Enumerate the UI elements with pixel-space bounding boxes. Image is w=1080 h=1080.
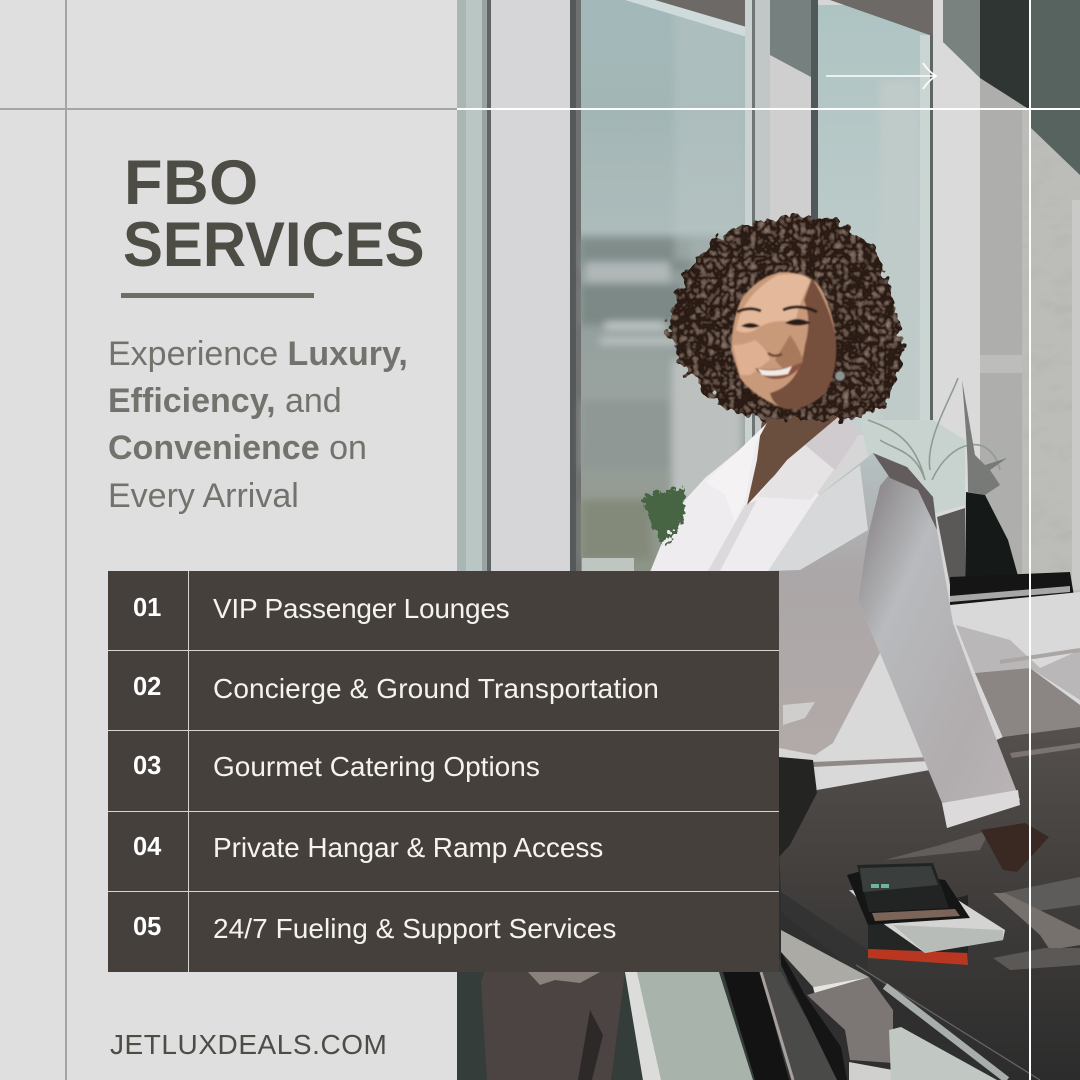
title underline [121, 293, 314, 298]
service 03: Gourmet Catering Options [213, 751, 540, 782]
pale window ledge [860, 420, 965, 515]
trousers waist [779, 757, 817, 857]
subtitle: Experience Luxury, [108, 335, 408, 373]
icon: arrow [826, 62, 938, 90]
left window frame [457, 0, 570, 575]
photo: woman at office window [457, 0, 1080, 1080]
grid line: horizontal gray [0, 108, 457, 110]
website url: JETLUXDEALS.COM [110, 1029, 387, 1060]
grid line: horizontal white [457, 108, 1080, 110]
hand [981, 823, 1049, 872]
title [123, 148, 425, 280]
service 01: VIP Passenger Lounges [213, 593, 509, 624]
service 05: 05 [133, 913, 161, 941]
wall shadow and sideboard [937, 380, 1022, 590]
service 02 [108, 650, 779, 730]
sleeve [858, 470, 1020, 828]
right window [770, 0, 935, 435]
title: FBO [124, 148, 259, 218]
subtitle: Every Arrival [108, 477, 299, 515]
subtitle: Efficiency, and [108, 382, 342, 420]
torso shadow [767, 453, 893, 755]
bottom left floor and trousers [457, 960, 841, 1080]
main window [570, 0, 770, 575]
table [778, 727, 1080, 1080]
shirt and body [650, 400, 1020, 828]
service 04: 04 [133, 833, 161, 861]
face [731, 272, 845, 409]
right collar [757, 413, 860, 500]
service 05: 24/7 Fueling & Support Services [213, 913, 616, 944]
turtleneck [747, 400, 848, 505]
grid line: vertical gray [65, 0, 67, 1080]
service 03 [108, 730, 779, 811]
title: SERVICES [123, 210, 425, 280]
chairs lower right [781, 930, 1007, 1080]
service 05 [108, 891, 779, 972]
service 02: Concierge & Ground Transportation [213, 673, 659, 704]
service 04 [108, 811, 779, 891]
grid line: vertical white [1029, 0, 1031, 1080]
service 02: 02 [133, 673, 161, 701]
subtitle: Convenience on [108, 429, 367, 467]
subtitle [108, 335, 408, 515]
panel: services list [108, 571, 779, 972]
service 03: 03 [133, 752, 161, 780]
right wall [933, 0, 1080, 600]
cuff [942, 790, 1020, 828]
chair back [813, 572, 1080, 792]
hair [670, 216, 902, 420]
plant [868, 378, 1000, 480]
service 04: Private Hangar & Ramp Access [213, 832, 603, 863]
small plant [642, 488, 685, 545]
books and calculator [847, 863, 1005, 965]
wall base [457, 0, 1080, 1080]
column divider [188, 571, 189, 972]
left collar [706, 423, 767, 522]
white shirt front [650, 425, 820, 572]
service 01: 01 [133, 594, 161, 622]
